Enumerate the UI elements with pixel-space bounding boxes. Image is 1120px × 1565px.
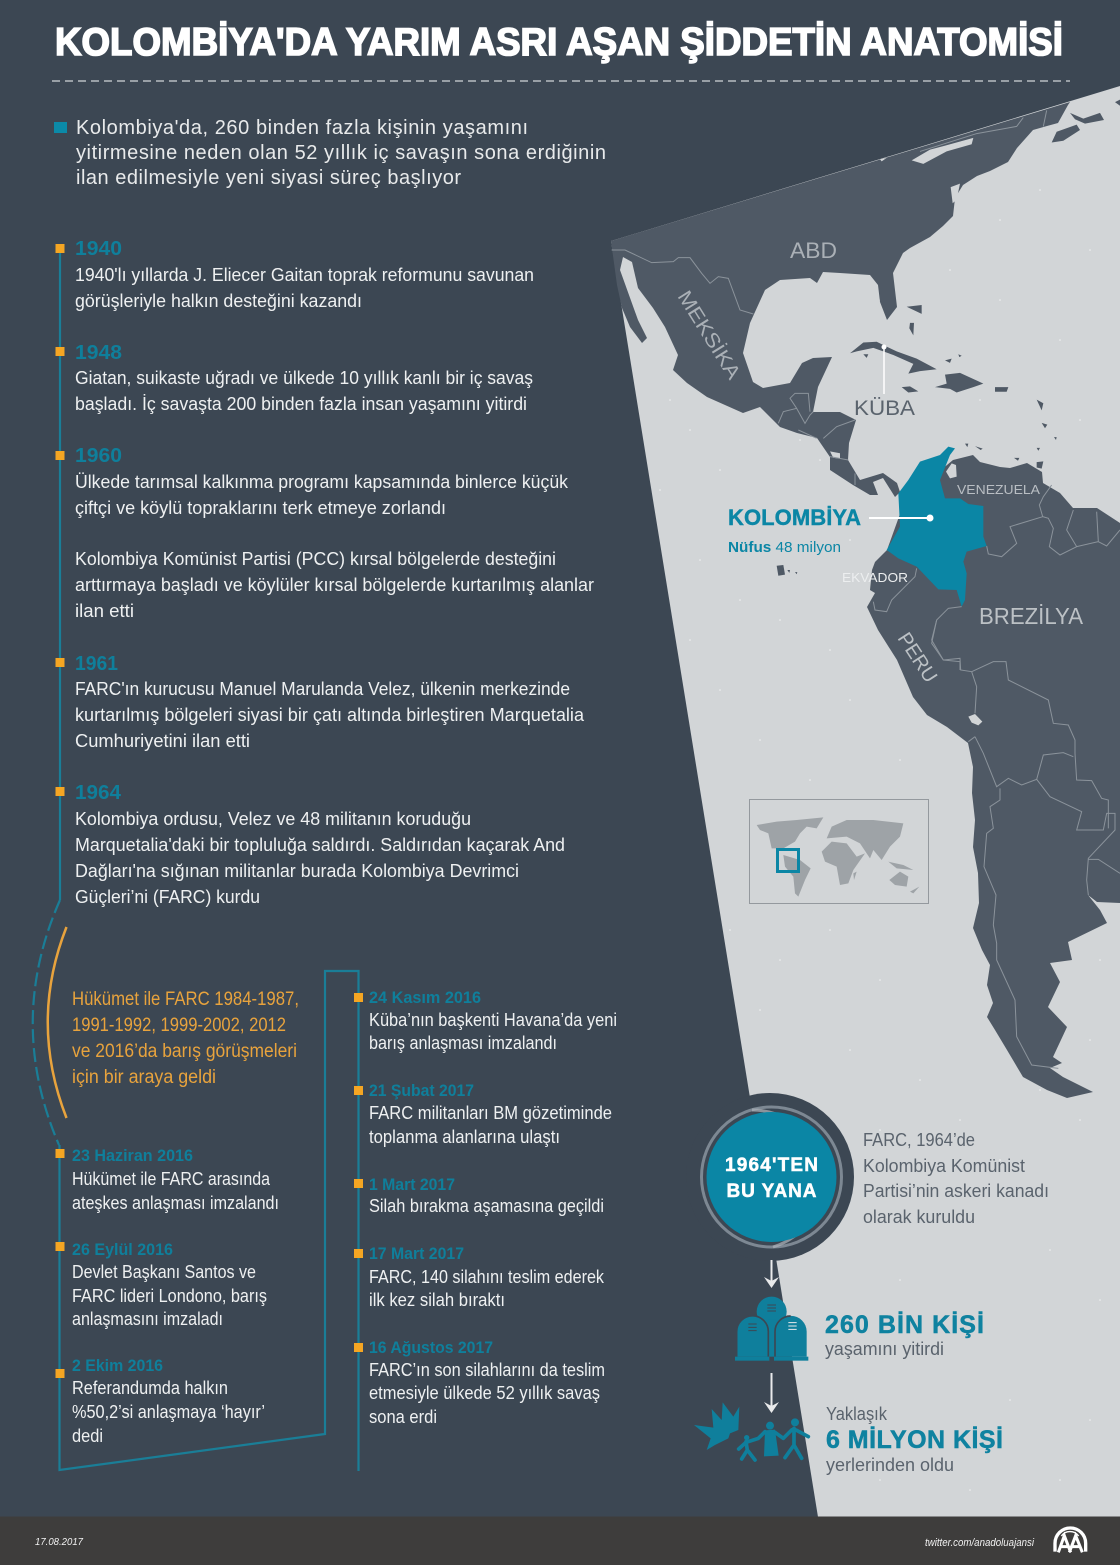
FARC description: Kolombiya Komünist (863, 1156, 1025, 1176)
timeline: 1 Mart 2017 (354, 1175, 604, 1216)
timeline: 1 Mart 2017: 1 Mart 2017 (369, 1175, 455, 1194)
timeline: 1961 (56, 652, 585, 751)
timeline: 1960: Ülkede tarımsal kalkınma programı kapsamında binlerce küçük (75, 472, 569, 492)
timeline: 17 Mart 2017: 17 Mart 2017 (369, 1244, 464, 1263)
callout: peace talks: 1991-1992, 1999-2002, 2012 (72, 1015, 286, 1036)
stat: 260 bin kişi: 260 BİN KİŞİ (825, 1311, 984, 1339)
timeline: 21 Şubat 2017: FARC militanları BM gözetiminde (369, 1103, 612, 1123)
timeline: 1964: Güçleri’ni (FARC) kurdu (75, 887, 260, 907)
timeline: 16 Ağustos 2017: sona erdi (369, 1407, 437, 1427)
badge: 1964'ten bu yana (686, 1093, 854, 1261)
timeline: 2 Ekim 2016: 2 Ekim 2016 (72, 1356, 163, 1375)
arrow: down to deaths (764, 1260, 779, 1288)
timeline: 16 Ağustos 2017 (354, 1338, 605, 1427)
timeline: 1948: Giatan, suikaste uğradı ve ülkede 10 yıllık kanlı bir iç savaş (75, 368, 533, 388)
label: Brezilya: BREZİLYA (979, 603, 1084, 629)
label: Meksika: MEKSİKA (673, 286, 746, 384)
Colombia highlighted (873, 447, 1120, 670)
timeline: 26 Eylül 2016 (56, 1240, 267, 1329)
timeline: 2 Ekim 2016: dedi (72, 1426, 103, 1446)
timeline: 24 Kasım 2016 (354, 988, 617, 1053)
timeline: 17 Mart 2017: ilk kez silah bıraktı (369, 1290, 505, 1310)
label: Venezuela: VENEZUELA (957, 482, 1040, 497)
timeline: 24 Kasım 2016: barış anlaşması imzalandı (369, 1033, 557, 1053)
timeline: 16 Ağustos 2017: FARC’ın son silahlarını da teslim (369, 1360, 605, 1380)
timeline: 1961: 1961 (75, 652, 118, 675)
timeline: 1940 (56, 237, 534, 311)
timeline: 26 Eylül 2016: Devlet Başkanı Santos ve (72, 1262, 256, 1282)
timeline: 21 Şubat 2017: 21 Şubat 2017 (369, 1081, 474, 1100)
stat: 6 milyon kişi: 6 MİLYON KİŞİ (826, 1426, 1003, 1454)
timeline: 1964: Marquetalia'daki bir topluluğa saldırdı. Saldırıdan kaçarak And (75, 835, 565, 855)
world continents (757, 817, 919, 897)
timeline: 1960: çiftçi ve köylü topraklarını terk etmeye zorlandı (75, 498, 446, 518)
North and Central America (611, 102, 1070, 497)
icon: tombstones (735, 1297, 808, 1361)
icon: AA logo (1055, 1528, 1086, 1552)
timeline: 26 Eylül 2016: 26 Eylül 2016 (72, 1240, 173, 1259)
label: Kolombiya callout: KOLOMBİYA (728, 505, 861, 530)
callout: peace talks: için bir araya geldi (72, 1067, 216, 1088)
locator square (778, 850, 798, 872)
timeline: 26 Eylül 2016: anlaşmasını imzaladı (72, 1309, 223, 1329)
timeline: 21 Şubat 2017: toplanma alanlarına ulaştı (369, 1127, 560, 1147)
timeline: 16 Ağustos 2017: 16 Ağustos 2017 (369, 1338, 493, 1357)
badge: 1964'ten bu yana: 1964'TEN (725, 1155, 818, 1176)
timeline: 23 Haziran 2016 (56, 1146, 279, 1213)
footer bar (0, 1516, 1120, 1565)
stat: 6 milyon kişi: yerlerinden oldu (826, 1455, 954, 1475)
timeline connector lines (33, 250, 358, 1471)
South America borders and lake (932, 620, 1120, 1068)
intro text: yitirmesine neden olan 52 yıllık iç savaşın sona erdiğinin (76, 142, 606, 164)
callout: peace talks: ve 2016’da barış görüşmeleri (72, 1041, 297, 1062)
timeline: 1964 (56, 781, 565, 907)
timeline: 1960 (56, 444, 594, 621)
timeline: 23 Haziran 2016: ateşkes anlaşması imzalandı (72, 1193, 279, 1213)
timeline: 1964: 1964 (75, 781, 122, 804)
timeline: 1960: ilan etti (75, 601, 134, 621)
inset world map (750, 800, 928, 904)
title: KOLOMBİYA'DA YARIM ASRI AŞAN ŞİDDETİN ANATOMİSİ (55, 21, 1063, 64)
label: Peru: PERU (893, 629, 941, 687)
label: Kolombiya callout: Nüfus 48 milyon (728, 539, 841, 556)
South America (867, 455, 1120, 1098)
timeline: 24 Kasım 2016: Küba’nın başkenti Havana’da yeni (369, 1010, 617, 1030)
timeline: 21 Şubat 2017 (354, 1081, 612, 1147)
timeline: 26 Eylül 2016: FARC lideri Londono, barış (72, 1286, 267, 1306)
intro text: ilan edilmesiyle yeni siyasi süreç başlıyor (76, 167, 461, 189)
intro text: Kolombiya'da, 260 binden fazla kişinin yaşamını (76, 117, 528, 139)
timeline: 1960: 1960 (75, 444, 122, 467)
FARC description: FARC, 1964’de (863, 1130, 975, 1150)
timeline: 1964: Dağları'na sığınan militanlar burada Kolombiya Devrimci (75, 861, 519, 881)
timeline: 1964: Kolombiya ordusu, Velez ve 48 militanın koruduğu (75, 809, 471, 829)
callout: peace talks (48, 927, 299, 1118)
timeline: 1 Mart 2017: Silah bırakma aşamasına geçildi (369, 1196, 604, 1216)
FARC description: olarak kuruldu (863, 1207, 975, 1227)
timeline: 16 Ağustos 2017: etmesiyle ülkede 52 yıllık savaş (369, 1383, 600, 1403)
timeline: 1948 (56, 341, 533, 414)
timeline: 24 Kasım 2016: 24 Kasım 2016 (369, 988, 481, 1007)
timeline: 1948: başladı. İç savaşta 200 binden fazla insan yaşamını yitirdi (75, 394, 527, 414)
timeline: 1960: arttırmaya başladı ve köylüler kırsal bölgelerde kurtarılmış alanlar (75, 575, 594, 595)
date: 17.08.2017 (35, 1536, 84, 1548)
speckle texture (660, 190, 1100, 1490)
timeline: 1961: Cumhuriyetini ilan etti (75, 731, 250, 751)
FARC description: Partisi’nin askeri kanadı (863, 1181, 1049, 1201)
stat: 6 milyon kişi: Yaklaşık (826, 1404, 888, 1424)
lakes and islands (777, 100, 1120, 576)
icon: explosion and fleeing family (694, 1402, 808, 1460)
borders: Mexico and Central America (612, 250, 855, 485)
badge: 1964'ten bu yana: BU YANA (726, 1181, 817, 1202)
stat: 260 bin kişi (825, 1311, 984, 1359)
arrow: down to displaced (764, 1373, 779, 1413)
timeline: 17 Mart 2017 (354, 1244, 605, 1310)
label: Kolombiya callout (728, 505, 934, 556)
label: ABD: ABD (790, 238, 837, 263)
callout: peace talks: Hükümet ile FARC 1984-1987, (72, 989, 299, 1010)
timeline: 2 Ekim 2016 (56, 1356, 265, 1446)
timeline: 1940: 1940'lı yıllarda J. Eliecer Gaitan toprak reformunu savunan (75, 265, 534, 285)
label: Küba with pointer (854, 344, 915, 420)
label: Küba with pointer: KÜBA (854, 397, 915, 420)
timeline: 2 Ekim 2016: Referandumda halkın (72, 1378, 228, 1398)
timeline: 1961: kurtarılmış bölgeleri siyasi bir çatı altında birleştiren Marquetalia (75, 705, 585, 725)
label: Ekvador: EKVADOR (842, 570, 908, 585)
timeline: 1940: görüşleriyle halkın desteğini kazandı (75, 291, 362, 311)
timeline: 2 Ekim 2016: %50,2’si anlaşmaya ‘hayır’ (72, 1402, 265, 1422)
timeline: 1961: FARC'ın kurucusu Manuel Marulanda Velez, ülkenin merkezinde (75, 679, 570, 699)
timeline: 17 Mart 2017: FARC, 140 silahını teslim ederek (369, 1267, 605, 1287)
stat: 6 milyon kişi (826, 1404, 1003, 1475)
timeline: 23 Haziran 2016: 23 Haziran 2016 (72, 1146, 193, 1165)
timeline: 23 Haziran 2016: Hükümet ile FARC arasında (72, 1169, 271, 1189)
timeline: 1960: Kolombiya Komünist Partisi (PCC) kırsal bölgelerde desteğini (75, 549, 556, 569)
FARC description (863, 1130, 1049, 1227)
timeline: 1948: 1948 (75, 341, 122, 364)
twitter handle: twitter.com/anadoluajansi (925, 1537, 1034, 1549)
timeline: 1940: 1940 (75, 237, 122, 260)
intro text (54, 117, 606, 189)
map labels (673, 238, 1084, 687)
map of the Americas (611, 86, 1120, 1517)
map background: ocean panel (611, 86, 1120, 1517)
stat: 260 bin kişi: yaşamını yitirdi (825, 1339, 944, 1359)
